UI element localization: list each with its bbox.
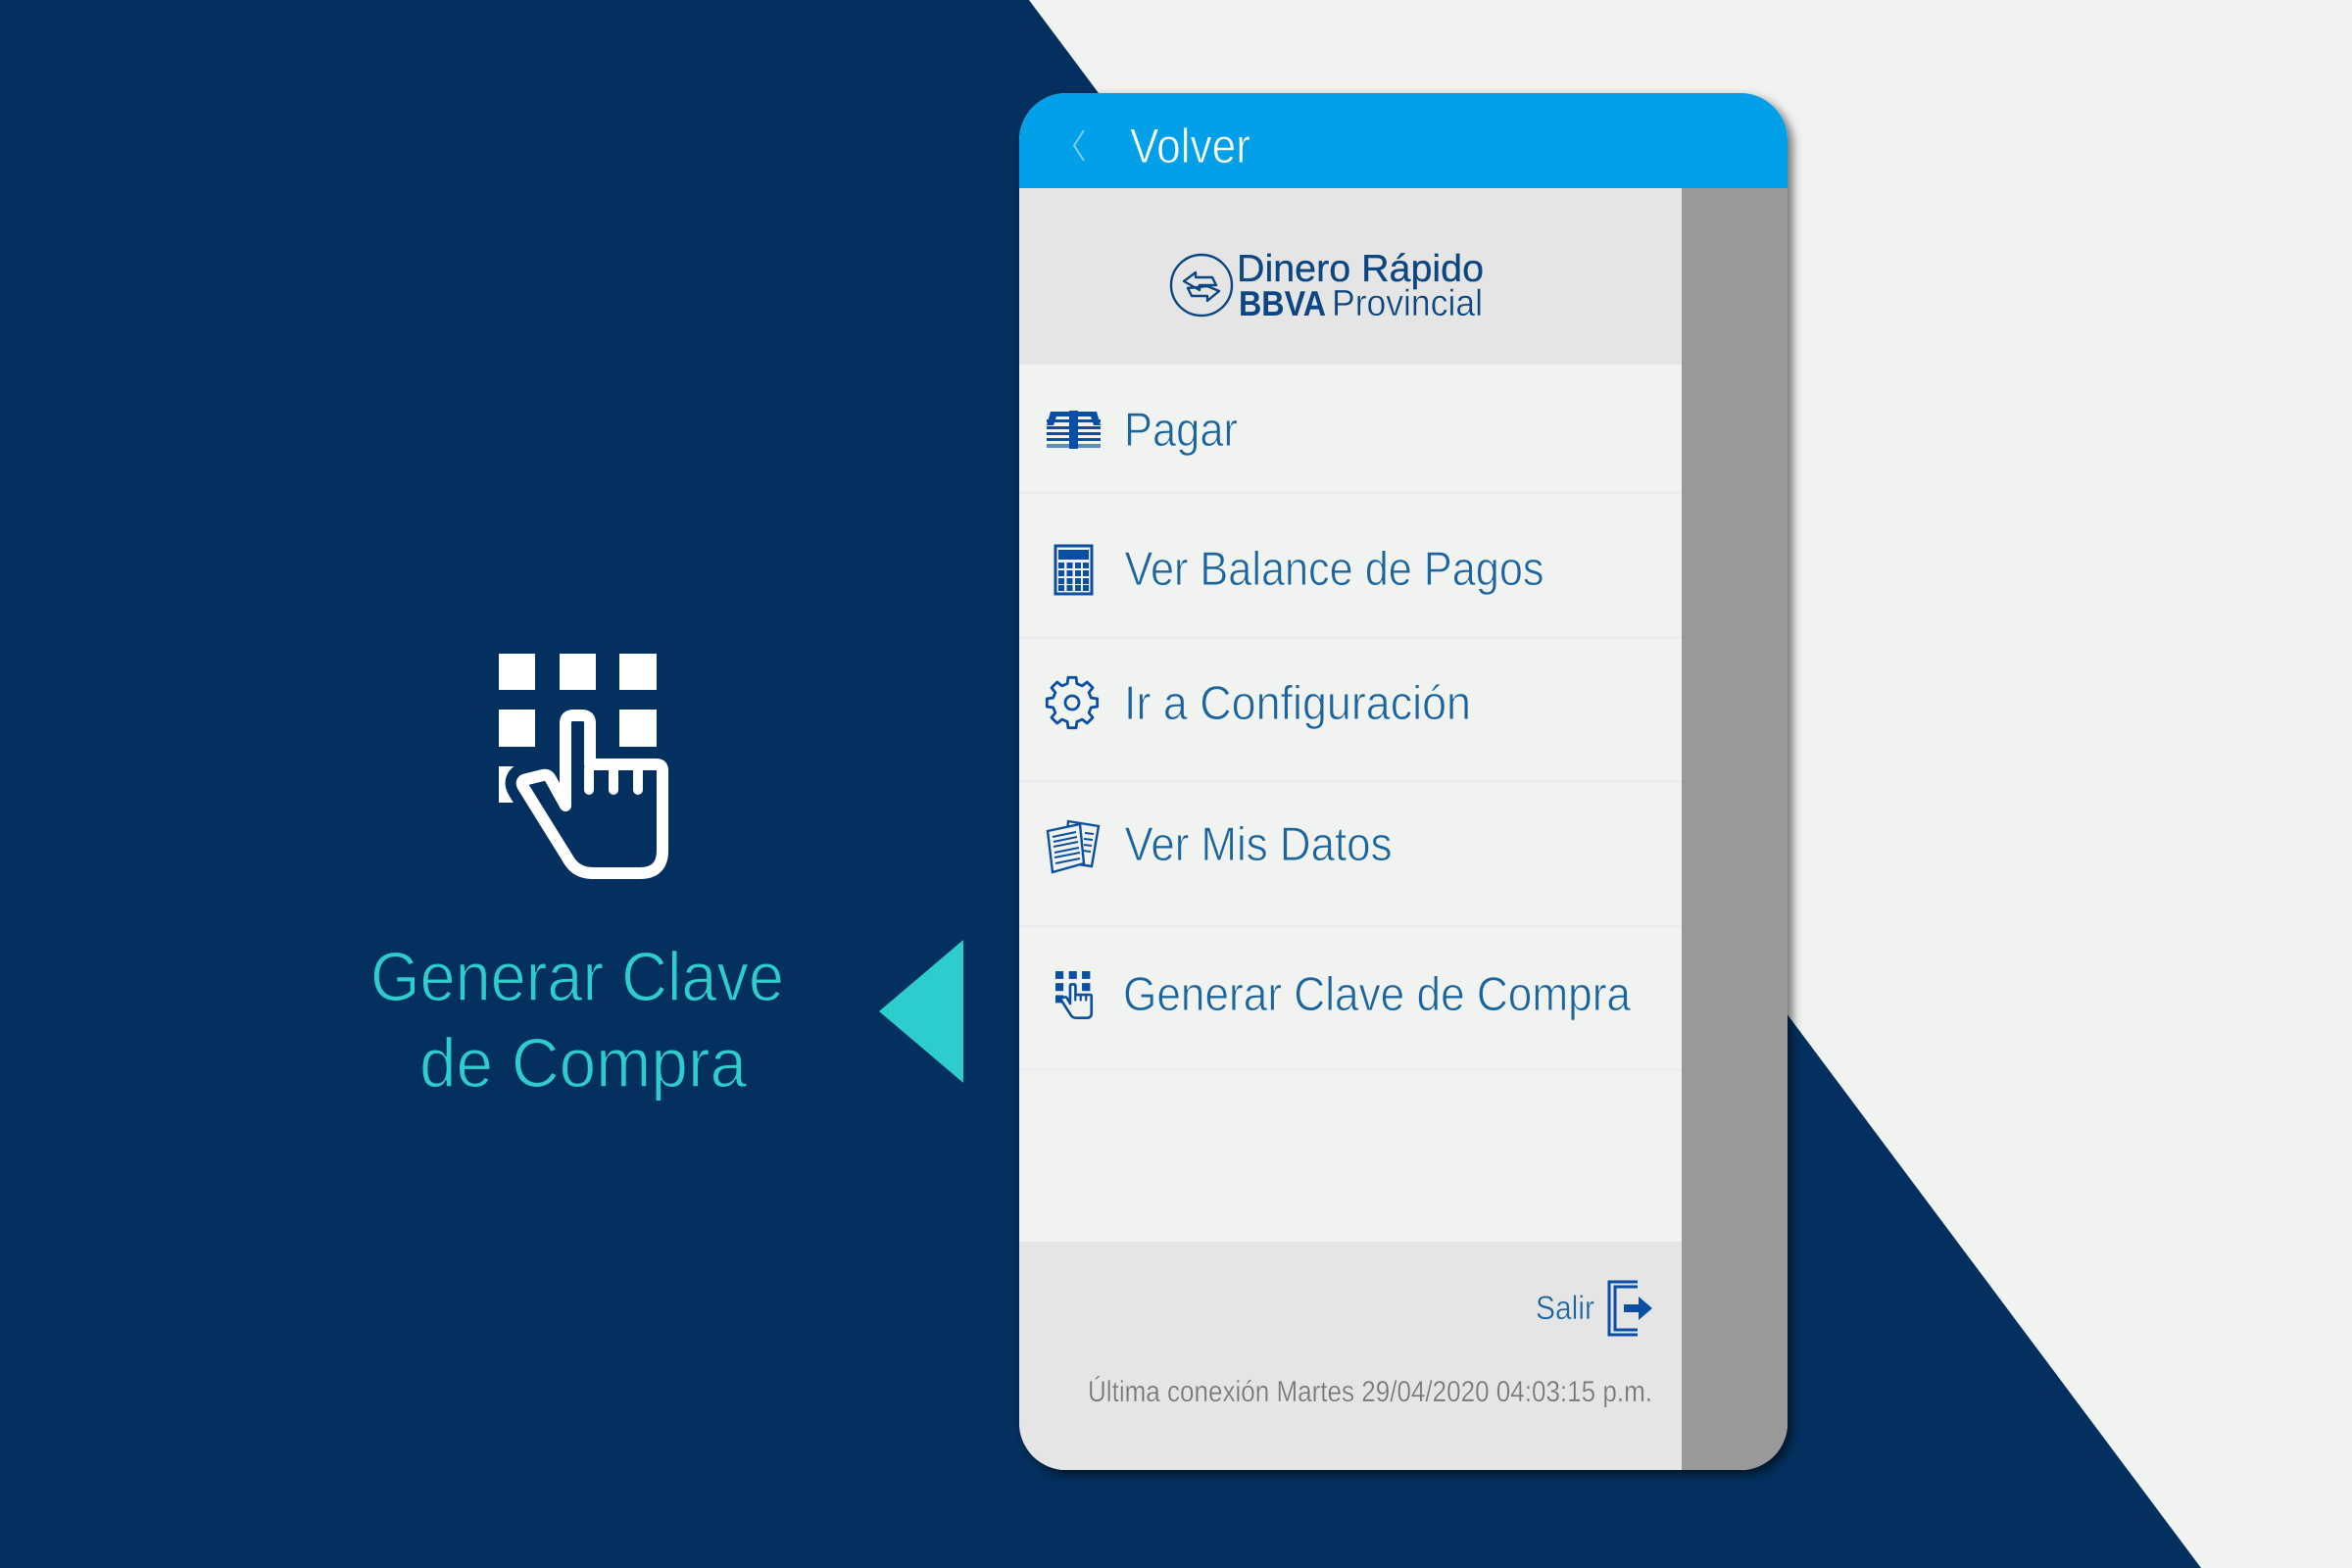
icon: keypad with pointing hand — [499, 654, 662, 873]
logo: Dinero Rápido BBVA Provincial: BBVA — [1239, 283, 1326, 323]
label: Generar Clave de Compra: Generar Clave de Compra — [1123, 968, 1632, 1021]
label: Volver: Volver — [1130, 119, 1250, 173]
label: Ir a Configuración: Ir a Configuración — [1124, 677, 1471, 730]
icon: circular exchange arrows — [1171, 255, 1232, 316]
icon: exit door — [1609, 1282, 1652, 1335]
menu item: Pagar — [1047, 404, 1238, 457]
menu item: Ver Balance de Pagos — [1055, 543, 1544, 596]
heading: Generar Clave de Compra: de Compra — [419, 1025, 747, 1102]
header: back link — [1074, 119, 1250, 173]
footer: Salir link — [1536, 1282, 1652, 1335]
menu item: Generar Clave de Compra — [1055, 968, 1632, 1021]
arrow: teal triangle pointing left — [879, 940, 963, 1083]
label: Ver Balance de Pagos: Ver Balance de Pagos — [1125, 543, 1544, 596]
panel: phone screen — [1019, 93, 1788, 1470]
heading: Generar Clave de Compra — [370, 939, 784, 1102]
label: Pagar: Pagar — [1124, 404, 1238, 457]
footer: last connection text: Última conexión Martes 29/04/2020 04:03:15 p.m. — [1088, 1375, 1652, 1408]
heading: Generar Clave de Compra: Generar Clave — [370, 939, 784, 1016]
icon: calculator — [1055, 546, 1092, 594]
icon: small keypad with hand — [1055, 971, 1092, 1018]
background: light diagonal area — [1029, 0, 2352, 1568]
logo: Dinero Rápido BBVA Provincial: Provincial — [1332, 283, 1483, 324]
label: Ver Mis Datos: Ver Mis Datos — [1125, 818, 1392, 871]
footer: Salir link: Salir — [1536, 1290, 1594, 1327]
icon: gear — [1047, 677, 1098, 728]
icon: back chevron — [1074, 130, 1084, 161]
menu item: Ver Mis Datos — [1048, 818, 1392, 872]
menu item: Ir a Configuración — [1047, 677, 1471, 730]
icon: stack of bills — [1047, 411, 1101, 449]
logo: Dinero Rápido BBVA Provincial: Dinero Rápido — [1237, 248, 1484, 290]
icon: documents — [1048, 821, 1099, 872]
logo: Dinero Rápido BBVA Provincial — [1171, 248, 1484, 324]
